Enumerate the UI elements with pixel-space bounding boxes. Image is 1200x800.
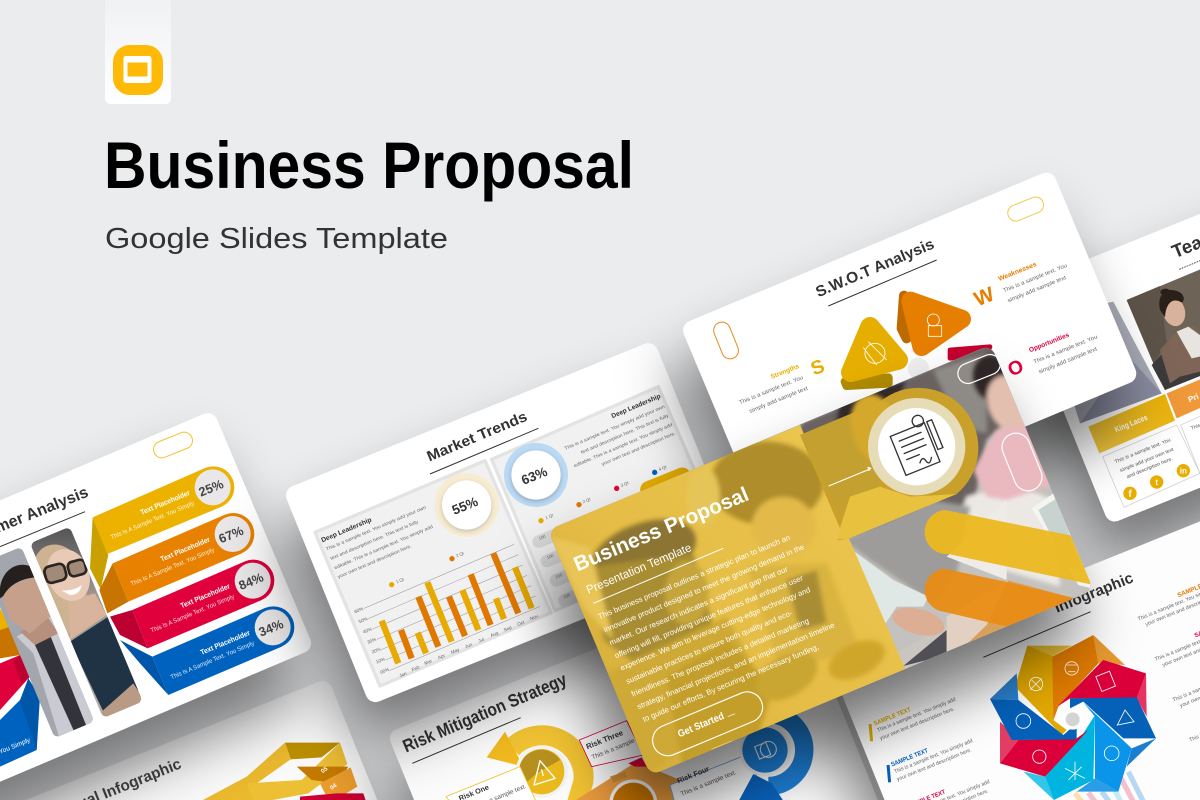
stripes [925,510,1098,630]
panel: process infographic [0,678,440,800]
donut: 63%: 63% [519,464,550,488]
ribbon: 34% [120,606,294,695]
connector line [477,772,520,790]
bar chart: Apr [437,653,446,660]
icon: twitter [1150,475,1163,489]
ribbon: 25%: This Is A Sample Text. You Simply [110,500,196,541]
bar chart: 50% [358,616,368,624]
bar chart: 30% [367,637,377,645]
table [956,580,1074,648]
legend [389,550,465,587]
risk three box [579,721,643,767]
logo tab [105,0,171,104]
ribbon: 34%: This Is A Sample Text. You Simply [170,640,256,681]
left ribbons [0,608,40,767]
strengths text [739,363,809,415]
panel: customer analysis [0,410,314,800]
hero paragraph: friendliness. The proposal includes a detailed marketing [630,616,810,699]
bar chart: 20% [371,646,381,655]
icon: twitter: t [1155,478,1158,487]
bar chart: 00% [380,667,390,675]
weaknesses text: Weaknesses [997,261,1038,283]
ribbon: 84%: Text Placeholder [179,581,231,610]
ribbon: 25%: 25% [197,477,226,500]
left list item: blue: your own text and description here. [896,747,973,783]
right chart panel [492,387,723,611]
hero paragraph: experience. We aim to leverage cutting-edge technology and [619,585,812,673]
weaknesses text [997,261,1068,304]
text: deep leadership [320,504,434,579]
decorative pills [955,351,1046,495]
3d ribbon chart [197,743,367,800]
strengths text: This is a sample text. You [739,375,804,406]
arrow [829,467,872,486]
circular arrow: blue [738,715,804,800]
sleeve [854,552,927,623]
panel: team [1006,132,1200,570]
photo: man in suit [1047,302,1162,423]
market heading: Market Trends [425,409,530,465]
ribbon: 34%: 34% [257,617,286,640]
yellow bar [638,465,696,506]
opportunities text [1028,332,1099,376]
risk three box: Risk Three [585,728,624,751]
team member header: orange: Pri [1187,392,1200,404]
title: Business Proposal [104,128,634,202]
donut: 55%: 55% [450,494,480,518]
small yellow pill [710,740,733,750]
ribbon: 84%: 84% [237,570,266,593]
text: deep leadership: This is a sample text. You simply add your own [325,504,427,552]
icon: contract document [868,398,965,495]
icon: linkedin: in [1180,467,1187,476]
legend: 3 Qt [620,480,630,488]
hub circle [908,358,929,379]
icon: facebook [1123,487,1137,500]
bar chart: Feb [411,664,421,672]
legend: 2 Qt [455,550,465,558]
pinwheel chart [990,635,1156,800]
triangle: weaknesses [902,296,962,347]
progress pills: 100 [562,592,572,600]
button: get started: Get Started [676,711,726,740]
text: deep leadership: text and description here. This text is fully [329,519,420,561]
bar chart: Sep [503,625,513,633]
panel: market trends [275,340,741,750]
letter S: S [808,356,828,380]
overlay panel with tinted photo [540,425,910,790]
bar chart: 40% [362,626,373,635]
hand [892,608,944,636]
pinwheel hub [1062,709,1083,730]
photo: woman [1127,267,1200,390]
bar chart: Jan [399,671,408,678]
sweater [843,500,970,603]
panel: swot analysis [672,169,1139,579]
ribbon: 67%: 67% [217,524,246,546]
photo: man [0,548,93,736]
photo: woman [32,528,142,716]
opportunities text: simply add sample text [1038,346,1099,376]
yellow band with circle [800,388,978,540]
donut: 55% [435,473,499,537]
legend [538,464,668,523]
ribbon: 25%: Text Placeholder [139,488,191,517]
weaknesses text: This is a sample text. You [1002,263,1068,294]
opportunities text: Opportunities [1028,332,1071,354]
bar chart: Mar [424,658,433,666]
hero paragraph: offering will fill, providing unique features that enhance user [613,573,805,660]
hero paragraph: to guide our efforts. By securing the necessary funding, [641,642,820,724]
left chart panel [315,461,551,686]
risk four box: Risk Four [676,764,711,785]
hero photo: woman and laptop [794,348,1090,686]
ribbon: 34%: Text Placeholder [199,628,251,657]
text: deep leadership right: This is a sample text. You simply add your own [564,404,666,451]
icon: google slides [113,45,163,95]
bar chart: Nov [529,613,539,621]
panel: infographic with pinwheel [824,513,1200,800]
ribbon: 25% [90,466,234,589]
hero title: Business Proposal [570,483,752,576]
button: get started [648,687,767,760]
bar chart: Oct [516,619,526,627]
hero subtitle: Presentation Template [584,540,694,597]
risk four box: This is a sample text. [680,769,738,798]
progress pills: 100 [538,533,547,541]
orange arrow band [573,757,680,800]
left list item: yellow: This is a sample text. You simply add [877,697,957,734]
pastel stripes [1075,772,1143,800]
text: deep leadership right [564,393,676,468]
team member header: orange [1167,377,1200,418]
risk three box: This is a sample [591,737,636,761]
progress pills: 100 [554,572,564,580]
team member description box [1103,425,1200,507]
woman [968,351,1057,500]
team member header: King Laces: King Laces [1113,413,1149,434]
hero paragraph: strategy, financial projections, and an implementation timeline [636,621,836,711]
risk heading: Risk Mitigation Strategy [400,669,570,756]
bar chart: 60% [354,606,364,614]
legend: 2 Qt [582,496,592,504]
laptop [898,652,946,672]
panel: hero slide [540,340,1120,800]
team member header: King Laces [1088,394,1175,453]
bar chart: Aug [489,630,499,638]
ribbon: 84%: This Is A Sample Text. You Simply [150,593,236,635]
weaknesses text: simply add sample text [1007,275,1068,304]
team member description box: simple add your own text [1119,447,1175,474]
text: deep leadership: Deep Leadership [320,517,373,544]
3d ribbon chart: 04 [329,783,339,792]
left list item: yellow: SAMPLE TEXT [873,706,912,728]
pinwheel icons [1016,662,1134,780]
ribbon: 67%: Text Placeholder [159,535,211,564]
icon: warning [516,746,568,798]
swot heading: S.W.O.T Analysis [813,236,937,301]
text: deep leadership: your own text and description here. [337,543,412,579]
donut: 63% [504,443,568,507]
text: deep leadership right: your own text and description here. [601,431,676,467]
icon: facebook: f [1128,489,1132,500]
laptop screen light [947,500,1007,580]
team member description box: and description here. [1126,456,1174,480]
bar chart: 10% [375,656,386,665]
decorative pills [711,195,1046,361]
hero paragraph: This business proposal outlines a strategic plan to launch an [597,533,791,621]
strengths text: simply add sample text [749,386,809,415]
text: deep leadership right: text and description here. This text is fully [580,413,670,455]
triangle: strengths [845,327,898,386]
risk one box [446,767,540,800]
3d ribbon chart: 05 [320,766,330,775]
progress pills [530,527,589,608]
bar chart [354,544,540,678]
team member description box: This is a sample text. You [1114,437,1172,465]
strengths text: Strengths [770,363,800,381]
bar chart: Jun [464,642,473,649]
panel: risk mitigation strategy [379,572,883,800]
left list item: yellow: your own text and description here. [879,706,956,742]
circular arrow: yellow [487,732,584,800]
hero paragraph: sustainable practices to ensure both quality and eco- [625,608,794,686]
left list item: blue: SAMPLE TEXT [890,747,929,769]
subtitle: Google Slides Template [105,223,448,255]
legend: 4 Qt [658,464,668,472]
tablet [1032,494,1090,588]
ribbon: 67%: This Is A Sample Text. You Simply [130,546,216,588]
bar chart: Jul [477,637,485,644]
hero paragraph: innovative product designed to meet the growing demand in the [602,542,806,634]
letter O: O [1005,356,1027,381]
hero paragraph: market. Our research indicates a significant gap that our [608,564,790,647]
icon: linkedin [1177,464,1190,477]
ribbon: 84% [110,560,274,648]
legend: 1 Qt [395,576,405,584]
text: deep leadership right: Deep Leadership [611,393,662,420]
text: deep leadership right: editable. This is a sample text. You simply add [573,422,673,468]
triangle: opportunities [950,347,990,358]
ribbon: 67% [99,513,254,613]
bar chart: May [450,647,461,655]
hero paragraph [597,533,836,724]
decorative pill [151,430,195,460]
legend: 1 Qt [544,512,555,520]
letter W: W [971,282,998,311]
risk four box [670,753,763,800]
progress pills: 100 [546,553,555,560]
opportunities text: This is a sample text. You [1033,334,1098,366]
text: deep leadership: editable. This is a sample text. You simply add [333,524,434,570]
infographic heading: Infographic [1052,569,1136,617]
left list item: blue: This is a sample text. You simply add [894,738,974,775]
